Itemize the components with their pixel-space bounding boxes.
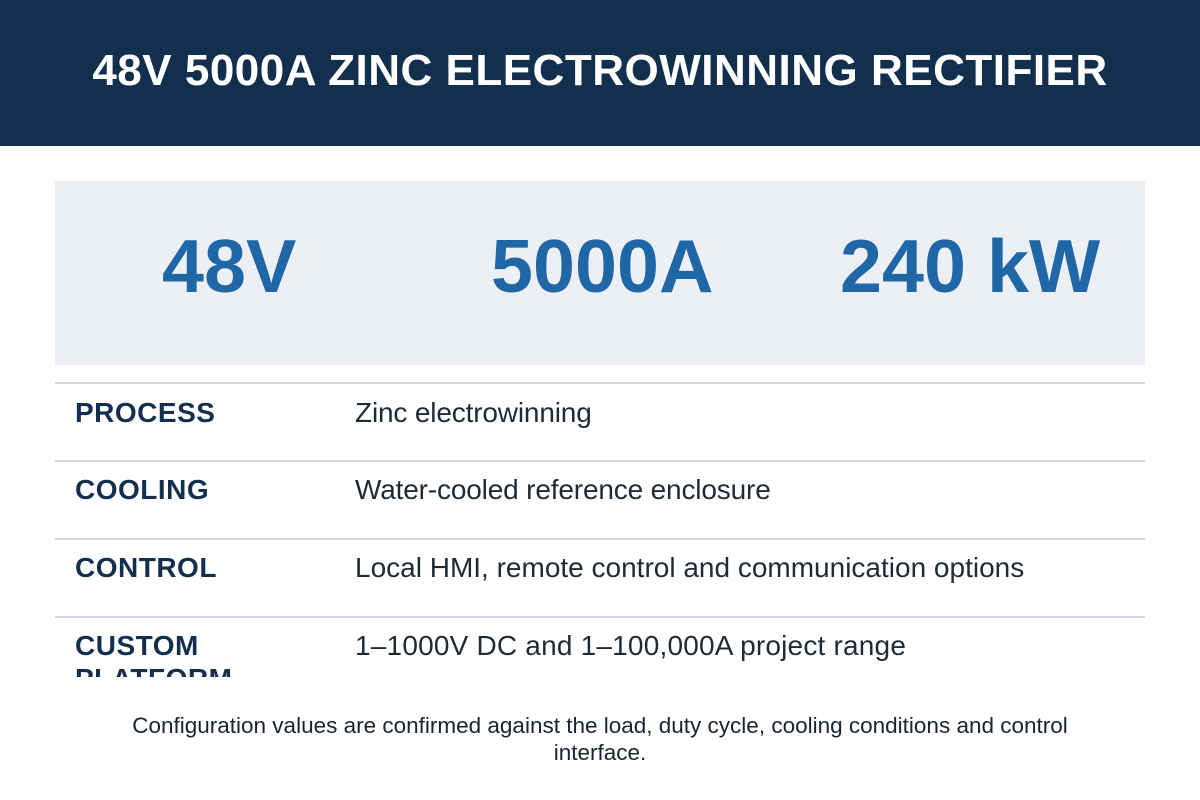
row: custom platform [75, 630, 906, 677]
title: 48V 5000A ZINC ELECTROWINNING RECTIFIER [92, 46, 1108, 95]
value: custom platform: 1–1000V DC and 1–100,000A project range [355, 630, 906, 661]
row: cooling [75, 474, 771, 505]
stat: voltage: 48V [162, 224, 296, 308]
label: cooling: COOLING [75, 474, 209, 505]
label: custom platform [75, 630, 232, 677]
stat: power: 240 kW [840, 224, 1100, 308]
footnote: Configuration values are confirmed against the load, duty cycle, cooling conditions and control [132, 713, 1068, 738]
header band [0, 0, 1200, 146]
footnote [132, 713, 1068, 765]
value: process: Zinc electrowinning [355, 397, 592, 428]
value: control: Local HMI, remote control and communication options [355, 552, 1024, 583]
value: cooling: Water-cooled reference enclosure [355, 474, 771, 505]
panel: key figures [55, 181, 1145, 365]
label: control: CONTROL [75, 552, 217, 583]
row: control [75, 552, 1024, 583]
label: process: PROCESS [75, 397, 215, 428]
stat: current: 5000A [491, 224, 713, 308]
footnote: interface. [554, 740, 646, 765]
label: custom platform: CUSTOM [75, 630, 199, 661]
row: process [75, 397, 592, 428]
